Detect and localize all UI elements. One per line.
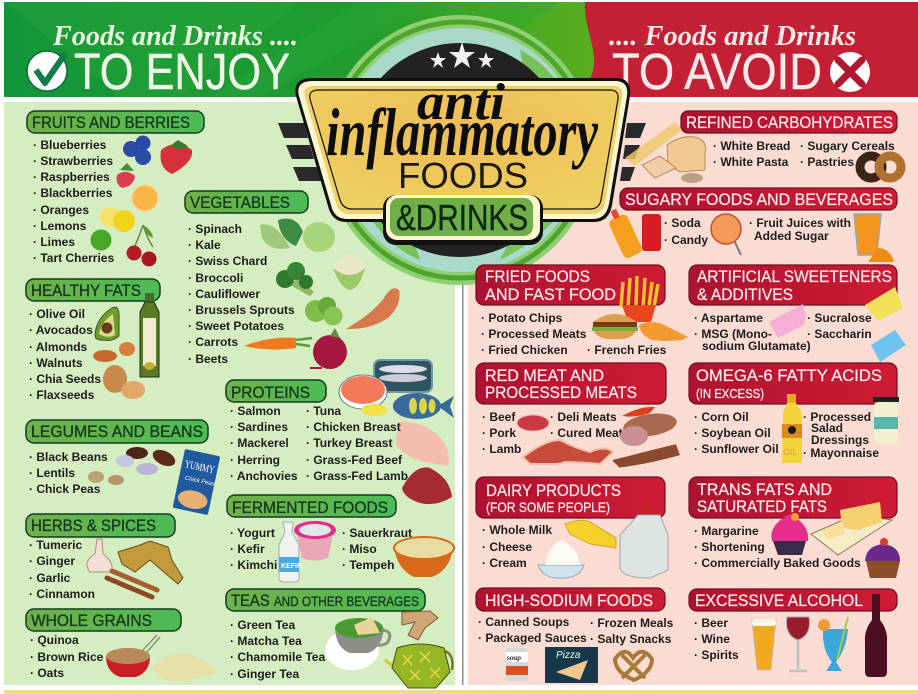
icon: blue packet	[871, 330, 906, 362]
icon: frozen pizza box: Pizza	[556, 650, 581, 661]
panel: vegetables	[185, 191, 400, 369]
list: · Kefir	[230, 542, 265, 556]
list: · Aspartame	[694, 311, 763, 325]
heading: TRANS FATS AND	[697, 480, 832, 499]
list: · Flaxseeds	[29, 388, 95, 402]
list: · Beer	[694, 616, 728, 630]
heading: & ADDITIVES	[697, 285, 793, 304]
heading: HEALTHY FATS	[31, 281, 141, 300]
heading	[476, 265, 665, 305]
list: · Pastries	[800, 155, 854, 169]
title badge	[278, 15, 646, 285]
heading: RED MEAT AND	[485, 366, 604, 385]
heading: (IN EXCESS)	[696, 386, 764, 401]
panel: herbs and spices	[26, 514, 183, 601]
icon: soup can	[506, 648, 528, 681]
list	[230, 526, 412, 572]
heading: SUGARY FOODS AND BEVERAGES	[625, 190, 893, 209]
icon: kefir bottle	[279, 522, 302, 582]
list: · Raspberries	[33, 170, 110, 184]
list: · Chick Peas	[29, 482, 101, 496]
list	[482, 410, 630, 456]
icon: chick pea can: YUMMY	[184, 458, 215, 476]
list	[29, 307, 101, 402]
icon: pink cupcake	[771, 513, 808, 555]
icon: soup can: soup	[507, 654, 521, 662]
list: Added Sugar	[754, 229, 829, 243]
list: · White Pasta	[713, 155, 789, 169]
heading: PROTEINS	[231, 383, 310, 402]
icon: fish	[393, 393, 454, 419]
banner heading: foods and drinks: Foods and Drinks ....	[52, 21, 298, 52]
list: · Matcha Tea	[230, 634, 302, 648]
bottom yellow strip	[4, 690, 918, 694]
heading	[476, 363, 666, 404]
list: · Soybean Oil	[694, 426, 771, 440]
list: · Green Tea	[230, 618, 295, 632]
icon: fried chicken	[639, 322, 688, 341]
list	[694, 311, 872, 353]
list: · Brussels Sprouts	[188, 303, 295, 317]
list	[30, 633, 104, 680]
list: · Oats	[30, 666, 64, 680]
list: · Kimchi	[230, 558, 277, 572]
icon: garlic	[87, 539, 112, 572]
list: · Cream	[482, 556, 527, 570]
panel: foods to avoid background	[468, 102, 918, 685]
icon: steak	[523, 440, 613, 464]
list: · Processed Meats	[481, 327, 587, 341]
icon: yogurt cup	[294, 521, 336, 560]
list: · Processed	[803, 410, 871, 424]
heading: ARTIFICIAL SWEETENERS	[697, 267, 892, 286]
panel: fruits and berries	[27, 111, 204, 266]
list	[481, 311, 667, 357]
list: · Carrots	[188, 335, 238, 349]
icon: cocktail	[818, 617, 848, 671]
list: · Chia Seeds	[29, 372, 101, 386]
panel: healthy fats	[26, 279, 160, 402]
list: · Cinnamon	[29, 587, 95, 601]
list: · Mayonnaise	[803, 446, 879, 460]
icon: olive oil bottle	[140, 293, 159, 377]
icon: lollipop	[711, 214, 741, 255]
title text: anti: anti	[417, 74, 506, 131]
icon: lemon slice	[361, 404, 387, 416]
list	[694, 616, 739, 662]
icon: sunflower oil bottle: OIL	[783, 447, 798, 457]
list: · Tempeh	[342, 558, 394, 572]
list: · Chicken Breast	[306, 420, 401, 434]
panel: high-sodium foods	[476, 588, 674, 683]
panel: proteins	[226, 360, 454, 504]
icon: donuts	[860, 156, 901, 178]
panel: dairy products	[476, 477, 668, 578]
panel: teas and other beverages	[226, 589, 453, 688]
banner heading: to avoid: TO AVOID	[612, 43, 822, 100]
icon: raw meat	[402, 467, 452, 504]
heading: HERBS & SPICES	[31, 516, 156, 535]
list: · Saccharin	[807, 327, 872, 341]
list: · Pork	[482, 426, 516, 440]
center divider line	[462, 280, 464, 685]
list: · Limes	[33, 235, 75, 249]
heading: SATURATED FATS	[697, 497, 827, 516]
panel: artificial sweeteners and additives	[689, 265, 906, 362]
list: · Tart Cherries	[33, 251, 114, 265]
heading: REFINED CARBOHYDRATES	[686, 113, 893, 132]
icon: almonds	[93, 342, 135, 362]
stars	[430, 42, 494, 68]
icon: pretzel	[615, 652, 652, 680]
icon: ginger and turmeric	[118, 541, 183, 584]
icon: mayonnaise jar	[873, 397, 899, 444]
icon: brussels sprouts	[305, 297, 342, 326]
heading	[476, 477, 665, 518]
icon: check mark	[27, 51, 67, 91]
list: · Shortening	[694, 540, 765, 554]
panel: fermented foods	[227, 495, 454, 582]
list: · Broccoli	[188, 271, 243, 285]
icon: carrot	[244, 338, 312, 350]
heading: FRIED FOODS	[485, 267, 590, 286]
heading	[689, 265, 897, 305]
icon: butter	[811, 502, 892, 555]
list: · Sugary Cereals	[800, 139, 895, 153]
list: · Wine	[694, 632, 730, 646]
icon: juice glass	[854, 214, 894, 262]
list: · Quinoa	[30, 633, 79, 647]
list: · Miso	[342, 542, 377, 556]
icon: red jar	[642, 214, 661, 251]
list: · Frozen Meals	[590, 616, 674, 630]
icon: kefir bottle: KEFIR	[281, 563, 302, 570]
heading: TEAS AND OTHER BEVERAGES	[231, 591, 419, 610]
pill: and drinks: &DRINKS	[396, 197, 528, 238]
list: · Grass-Fed Lamb	[306, 469, 408, 483]
icon: oats	[150, 653, 219, 681]
list: · Fruit Juices with	[749, 216, 851, 230]
list: · Mackerel	[230, 436, 289, 450]
icon: blueberries	[123, 136, 151, 165]
panel: legumes and beans	[26, 420, 221, 515]
list: · Corn Oil	[694, 410, 749, 424]
list	[478, 615, 674, 646]
icon: french fries	[621, 276, 658, 322]
heading: FERMENTED FOODS	[232, 498, 388, 517]
panel: trans fats and saturated fats	[689, 477, 900, 578]
icon: salami	[622, 407, 655, 417]
heading: OMEGA-6 FATTY ACIDS	[696, 366, 882, 385]
list: · Sucralose	[807, 311, 872, 325]
list: · Garlic	[29, 571, 71, 585]
heading: DAIRY PRODUCTS	[486, 481, 621, 500]
icon: yellow packet	[865, 287, 903, 321]
icon: lemons	[100, 207, 135, 232]
panel: red meat and processed meats	[476, 363, 678, 466]
list: · Brown Rice	[30, 650, 104, 664]
heading: AND FAST FOOD	[485, 285, 616, 304]
panel: refined carbohydrates	[625, 111, 901, 183]
list: · Margarine	[694, 524, 759, 538]
panel: fried foods and fast food	[476, 265, 688, 357]
heading	[689, 363, 897, 404]
heading: FRUITS AND BERRIES	[32, 113, 190, 132]
header: green banner	[4, 2, 594, 100]
list: · Cauliflower	[188, 287, 260, 301]
icon: beans	[88, 447, 178, 485]
list: · Blueberries	[33, 138, 107, 152]
panel: foods to enjoy background	[4, 102, 455, 685]
list: · Avocados	[29, 323, 93, 337]
list: Dressings	[811, 433, 869, 447]
icon: grain bowl	[106, 635, 160, 677]
icon: beet	[310, 328, 347, 369]
icon: raspberry	[117, 163, 135, 188]
list: · Spinach	[188, 222, 242, 236]
list: · Yogurt	[230, 526, 275, 540]
list: · Sweet Potatoes	[188, 319, 284, 333]
title text: foods: FOODS	[398, 155, 528, 196]
list: · Ginger Tea	[230, 667, 299, 681]
list: · Whole Milk	[482, 523, 552, 537]
list: · Beef	[482, 410, 516, 424]
list: · Sardines	[230, 420, 288, 434]
list: · MSG (Mono-	[694, 327, 772, 341]
list	[482, 523, 552, 570]
heading: WHOLE GRAINS	[31, 611, 152, 630]
list	[230, 404, 408, 483]
heading	[689, 477, 897, 518]
list: · Chamomile Tea	[230, 650, 325, 664]
list	[694, 410, 879, 460]
list: · Spirits	[694, 648, 739, 662]
icon: leafy greens	[260, 218, 335, 252]
icon: sunflower oil bottle	[782, 394, 802, 463]
list: · Commercially Baked Goods	[694, 556, 861, 570]
list: · Oranges	[33, 203, 89, 217]
icon: walnuts	[103, 365, 145, 399]
list	[664, 216, 851, 247]
list	[33, 138, 114, 265]
list: · Soda	[664, 216, 701, 230]
list: · Blackberries	[33, 186, 113, 200]
icon: cherries	[126, 225, 156, 266]
icon: cream bowl	[538, 540, 584, 578]
list: · Cured Meats	[550, 426, 630, 440]
icon: sardine tin	[374, 360, 432, 392]
heading: (FOR SOME PEOPLE)	[486, 499, 610, 515]
icon: ginger root	[402, 611, 438, 640]
list: · Tumeric	[29, 538, 82, 552]
list: · Swiss Chard	[188, 254, 267, 268]
icon: burger	[592, 314, 638, 339]
icon: chicken	[396, 422, 449, 466]
list: · Salty Snacks	[590, 632, 672, 646]
icon: chocolate cupcake	[865, 538, 900, 578]
icon: pink packet	[769, 304, 806, 338]
icon: orange	[132, 185, 158, 211]
icon: soda bottle	[604, 206, 643, 260]
icon: miso bowl	[394, 537, 454, 577]
list	[29, 450, 108, 496]
list: · White Bread	[713, 139, 790, 153]
panel: excessive alcohol	[689, 589, 897, 677]
icon: wine bottle	[865, 594, 887, 677]
icon: chick pea can	[173, 449, 221, 515]
list: · Beets	[188, 352, 228, 366]
heading: PROCESSED MEATS	[485, 383, 637, 402]
list	[694, 524, 861, 570]
list: · Strawberries	[33, 154, 113, 168]
list	[29, 538, 95, 601]
list: Salad	[811, 421, 843, 435]
list: · Black Beans	[29, 450, 108, 464]
list: · Lentils	[29, 466, 75, 480]
list	[713, 139, 895, 169]
list: · Potato Chips	[481, 311, 563, 325]
list: · Lamb	[482, 442, 521, 456]
icon: tea cup	[325, 617, 390, 670]
icon: sausage	[615, 446, 678, 466]
list: · Ginger	[29, 554, 75, 568]
icon: pasta sticks	[625, 122, 682, 166]
icon: sweet potato	[346, 288, 400, 329]
panel: omega-6 fatty acids	[689, 363, 899, 463]
icon: cross mark	[830, 52, 870, 92]
list: · French Fries	[587, 343, 667, 357]
list: · Kale	[188, 238, 221, 252]
icon: avocado	[95, 307, 119, 340]
list: · Cheese	[482, 540, 532, 554]
list: · Walnuts	[29, 356, 83, 370]
heading: VEGETABLES	[190, 193, 290, 212]
icon: lime	[90, 230, 112, 250]
icon: broccoli	[276, 262, 314, 296]
icon: beef slice	[517, 415, 549, 431]
list	[230, 618, 325, 681]
stripes	[278, 123, 646, 181]
list: · Canned Soups	[478, 615, 570, 629]
list: · Anchovies	[230, 469, 298, 483]
list: · Salmon	[230, 404, 281, 418]
title text: inflammatory: inflammatory	[326, 94, 599, 170]
header: red banner	[580, 2, 918, 100]
list: · Lemons	[33, 219, 87, 233]
list: · Tuna	[306, 404, 341, 418]
list: · Fried Chicken	[481, 343, 568, 357]
list: · Herring	[230, 453, 280, 467]
list: · Deli Meats	[550, 410, 617, 424]
panel: whole grains	[26, 609, 219, 681]
list: · Turkey Breast	[306, 436, 392, 450]
heading: LEGUMES AND BEANS	[31, 422, 203, 441]
icon: wine glass	[786, 617, 810, 671]
icon: chick pea can: Chick Peas	[184, 476, 215, 488]
panel: sugary foods and beverages	[604, 188, 897, 262]
list: · Sauerkraut	[342, 526, 412, 540]
icon: beer glass	[752, 619, 776, 670]
icon: cinnamon	[107, 571, 157, 597]
list: · Candy	[664, 233, 708, 247]
icon: green teapot	[385, 644, 453, 688]
list: · Packaged Sauces	[478, 631, 587, 645]
icon: frozen pizza box	[545, 647, 598, 683]
list: sodium Glutamate)	[702, 339, 811, 353]
list: · Olive Oil	[29, 307, 85, 321]
icon: cauliflower	[333, 254, 365, 290]
icon: salmon steak	[339, 375, 387, 409]
banner heading: to enjoy: TO ENJOY	[74, 43, 290, 100]
icon: cheese	[565, 520, 616, 548]
icon: strawberry	[160, 140, 192, 174]
icon: cured sausage slices	[620, 410, 678, 446]
heading: EXCESSIVE ALCOHOL	[695, 591, 863, 610]
heading: HIGH-SODIUM FOODS	[485, 591, 653, 610]
list: · Almonds	[29, 340, 88, 354]
list	[188, 222, 295, 366]
banner heading: foods and drinks: .... Foods and Drinks	[609, 21, 856, 52]
list: · Sunflower Oil	[694, 442, 779, 456]
icon: bread	[642, 137, 706, 183]
list: · Grass-Fed Beef	[306, 453, 403, 467]
icon: milk jug	[620, 506, 668, 578]
